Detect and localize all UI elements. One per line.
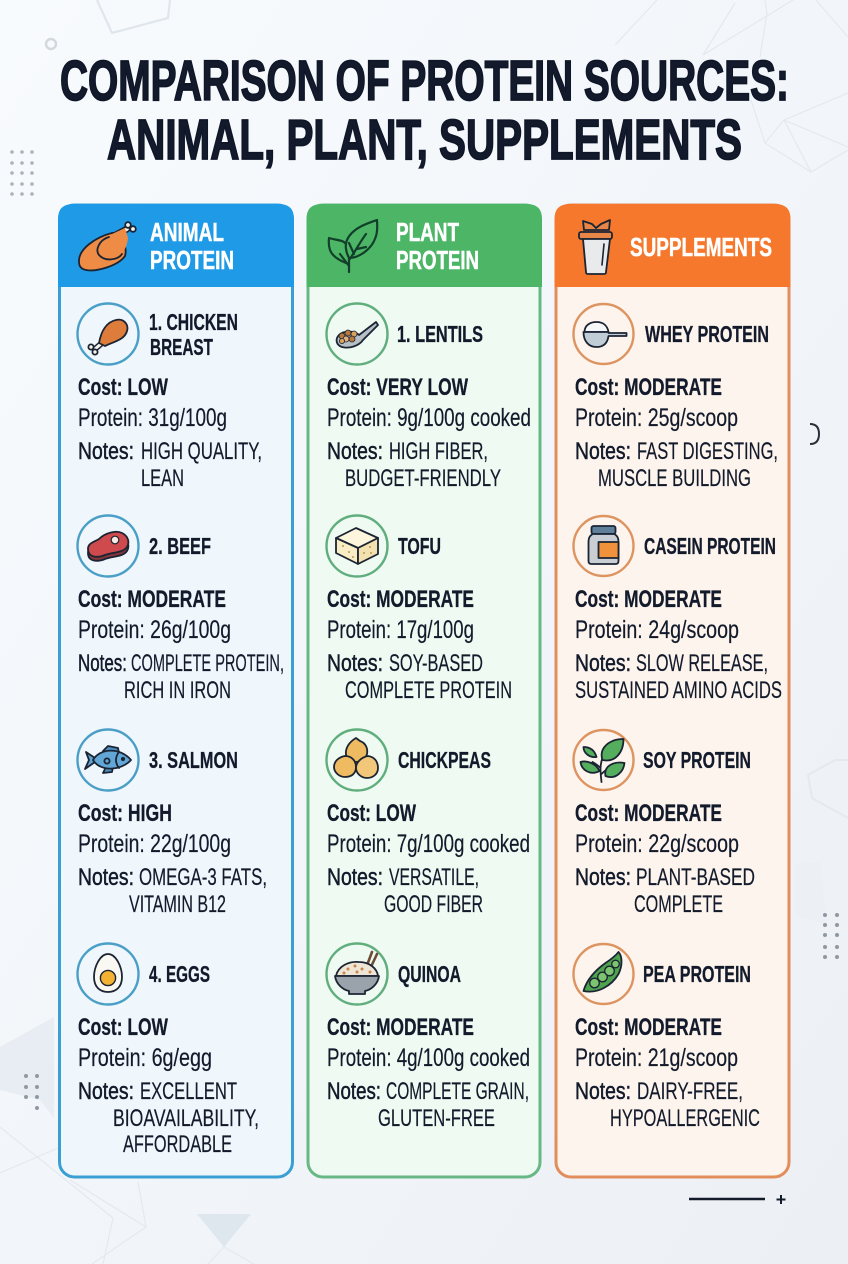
protein: Protein: 24g/scoop xyxy=(575,616,739,644)
notes: DAIRY-FREE, xyxy=(637,1078,743,1105)
notes: VERSATILE, xyxy=(389,864,479,891)
item: tofu xyxy=(326,516,512,704)
notes: BUDGET-FRIENDLY xyxy=(345,465,501,492)
icon: quinoa bowl xyxy=(335,952,379,994)
cost: Cost: VERY LOW xyxy=(327,374,469,401)
notes: PLANT-BASED xyxy=(636,864,755,891)
notes: GOOD FIBER xyxy=(384,891,483,918)
icon: soy plant xyxy=(580,739,624,782)
heading: plant protein: PROTEIN xyxy=(396,245,479,275)
name: 3. SALMON xyxy=(149,747,238,773)
notes xyxy=(327,1078,529,1132)
notes: OMEGA-3 FATS, xyxy=(139,864,267,891)
heading: animal protein xyxy=(150,217,234,275)
notes xyxy=(78,1078,259,1158)
title xyxy=(60,49,789,172)
notes: Notes: xyxy=(575,650,631,677)
name: 1. LENTILS xyxy=(397,321,483,347)
icon: tofu block xyxy=(336,528,378,564)
protein: Protein: 6g/egg xyxy=(78,1044,212,1072)
notes: GLUTEN-FREE xyxy=(378,1105,495,1132)
name: SOY PROTEIN xyxy=(643,747,751,773)
item: whey protein xyxy=(574,304,778,492)
item: pea protein xyxy=(574,944,760,1132)
notes: MUSCLE BUILDING xyxy=(598,465,751,492)
icon: fish xyxy=(85,746,131,773)
notes xyxy=(78,650,284,704)
notes xyxy=(78,864,267,918)
notes xyxy=(327,438,501,492)
notes: SLOW RELEASE, xyxy=(636,650,768,677)
name: QUINOA xyxy=(398,961,461,987)
item: lentils xyxy=(326,304,531,492)
icon: scoop xyxy=(584,322,626,347)
icon: steak xyxy=(88,532,128,561)
cost: Cost: MODERATE xyxy=(78,586,226,613)
notes xyxy=(575,438,778,492)
name: CHICKPEAS xyxy=(398,747,491,773)
notes: RICH IN IRON xyxy=(124,677,231,704)
icon: spoon with lentils xyxy=(337,322,378,348)
name: 2. BEEF xyxy=(149,533,211,559)
notes: BIOAVAILABILITY, xyxy=(113,1105,259,1132)
notes: Notes: xyxy=(327,650,383,677)
panel: animal protein xyxy=(58,204,294,1177)
name: PEA PROTEIN xyxy=(643,961,751,987)
cost: Cost: LOW xyxy=(78,374,169,401)
notes xyxy=(575,650,782,704)
protein: Protein: 21g/scoop xyxy=(575,1044,738,1072)
heading: animal protein: PROTEIN xyxy=(150,245,234,275)
notes: HYPOALLERGENIC xyxy=(610,1105,760,1132)
notes: Notes: xyxy=(327,864,383,891)
panel: plant protein xyxy=(306,204,542,1177)
item: casein protein xyxy=(574,516,782,704)
heading: plant protein xyxy=(396,217,479,275)
item: eggs xyxy=(78,944,259,1158)
protein: Protein: 9g/100g cooked xyxy=(327,404,531,432)
notes: COMPLETE xyxy=(634,891,723,918)
icon: pea pod xyxy=(584,952,622,992)
notes: Notes: xyxy=(78,1078,134,1105)
protein: Protein: 31g/100g xyxy=(78,404,227,432)
cost: Cost: MODERATE xyxy=(575,1014,722,1041)
notes: AFFORDABLE xyxy=(123,1131,232,1158)
notes: Notes: xyxy=(575,1078,631,1105)
cost: Cost: MODERATE xyxy=(575,800,722,827)
cost: Cost: MODERATE xyxy=(575,586,722,613)
notes: COMPLETE PROTEIN, xyxy=(131,650,284,677)
notes: HIGH QUALITY, xyxy=(141,438,262,465)
notes xyxy=(575,1078,760,1132)
icon: drumstick xyxy=(88,320,127,355)
name xyxy=(149,309,238,360)
notes xyxy=(327,650,512,704)
notes: Notes: xyxy=(327,1078,381,1105)
notes: Notes: xyxy=(78,650,127,677)
icon: roast chicken xyxy=(79,222,136,270)
notes: Notes: xyxy=(78,864,134,891)
notes: COMPLETE PROTEIN xyxy=(345,677,512,704)
notes: SOY-BASED xyxy=(389,650,483,677)
item: soy protein xyxy=(574,730,755,918)
notes: LEAN xyxy=(141,465,184,492)
name: BREAST xyxy=(150,334,213,360)
name: 4. EGGS xyxy=(149,961,210,987)
notes: Notes: xyxy=(327,438,383,465)
heading: supplements: SUPPLEMENTS xyxy=(630,232,772,262)
icon: jar xyxy=(588,526,618,564)
notes xyxy=(575,864,755,918)
item: quinoa xyxy=(326,944,530,1132)
cost: Cost: LOW xyxy=(327,800,417,827)
notes xyxy=(327,864,483,918)
icon: egg xyxy=(94,954,122,992)
icon: shaker xyxy=(579,220,612,274)
cost: Cost: MODERATE xyxy=(327,586,474,613)
protein: Protein: 25g/scoop xyxy=(575,404,738,432)
item: chickpeas xyxy=(326,730,530,918)
notes: HIGH FIBER, xyxy=(389,438,488,465)
notes: EXCELLENT xyxy=(140,1078,237,1105)
panel: supplements xyxy=(554,204,790,1177)
notes xyxy=(78,438,262,492)
protein: Protein: 26g/100g xyxy=(78,616,231,644)
notes: Notes: xyxy=(575,438,631,465)
name: TOFU xyxy=(398,533,441,559)
cost: Cost: LOW xyxy=(78,1014,169,1041)
item: beef xyxy=(78,516,284,704)
name: CASEIN PROTEIN xyxy=(644,533,776,559)
notes: COMPLETE GRAIN, xyxy=(386,1078,529,1105)
cost: Cost: MODERATE xyxy=(327,1014,474,1041)
notes: VITAMIN B12 xyxy=(129,891,226,918)
notes: Notes: xyxy=(575,864,631,891)
notes: Notes: xyxy=(78,438,134,465)
name: WHEY PROTEIN xyxy=(645,321,769,347)
protein: Protein: 4g/100g cooked xyxy=(327,1044,530,1072)
protein: Protein: 17g/100g xyxy=(327,616,474,644)
notes: FAST DIGESTING, xyxy=(637,438,778,465)
name: 1. CHICKEN xyxy=(149,309,238,335)
heading: plant protein: PLANT xyxy=(396,217,459,247)
heading: animal protein: ANIMAL xyxy=(150,217,224,247)
item: chicken breast xyxy=(78,304,262,492)
icon: leaf xyxy=(329,220,377,272)
protein: Protein: 7g/100g cooked xyxy=(327,830,530,858)
cost: Cost: HIGH xyxy=(78,800,172,827)
item: salmon xyxy=(78,730,267,918)
cost: Cost: MODERATE xyxy=(575,374,722,401)
icon: chickpeas xyxy=(334,738,378,778)
protein: Protein: 22g/scoop xyxy=(575,830,739,858)
protein: Protein: 22g/100g xyxy=(78,830,231,858)
